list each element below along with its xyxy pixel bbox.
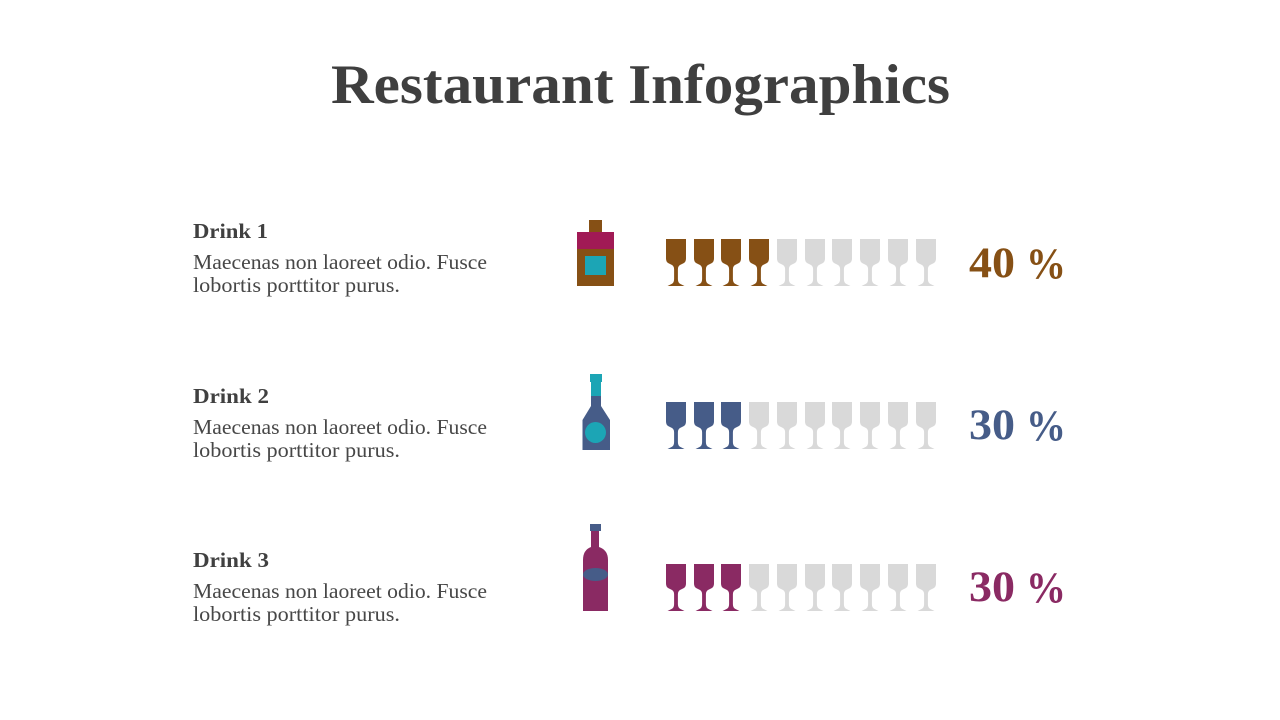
title: Restaurant Infographics [331,54,950,116]
value: 40 percent: 40 [969,240,1015,287]
value: 30 percent [969,402,1066,450]
drink 2 description: lobortis porttitor purus. [193,438,400,462]
drink 1 description: lobortis porttitor purus. [193,273,400,297]
panel: drink 3 [193,524,1066,626]
drink 3 description: Maecenas non laoreet odio. Fusce [193,579,487,603]
value: 30 percent: % [1026,565,1066,612]
drink 1 description [193,250,487,297]
drink 3 heading: Drink 3 [193,548,269,572]
drink 1 description: Maecenas non laoreet odio. Fusce [193,250,487,274]
value: 40 percent: % [1026,241,1066,288]
drink 3 description: lobortis porttitor purus. [193,602,400,626]
pictogram: 30 percent wine glasses [666,564,936,611]
panel: drink 2 [193,374,1066,462]
drink 2 description: Maecenas non laoreet odio. Fusce [193,415,487,439]
panel: drink 1 [193,219,1066,297]
pictogram: 30 percent wine glasses [666,402,936,449]
icon: square bottle [577,220,614,286]
value: 30 percent: 30 [969,564,1015,611]
value: 30 percent: 30 [969,402,1015,449]
value: 40 percent [969,240,1066,288]
drink 2 description [193,415,487,462]
drink 1 heading: Drink 1 [193,219,268,243]
pictogram: 40 percent wine glasses [666,239,936,286]
icon: tapered bottle [582,374,610,450]
value: 30 percent [969,564,1066,612]
icon: wine bottle [583,524,608,611]
value: 30 percent: % [1026,403,1066,450]
drink 2 heading: Drink 2 [193,384,269,408]
drink 3 description [193,579,487,626]
